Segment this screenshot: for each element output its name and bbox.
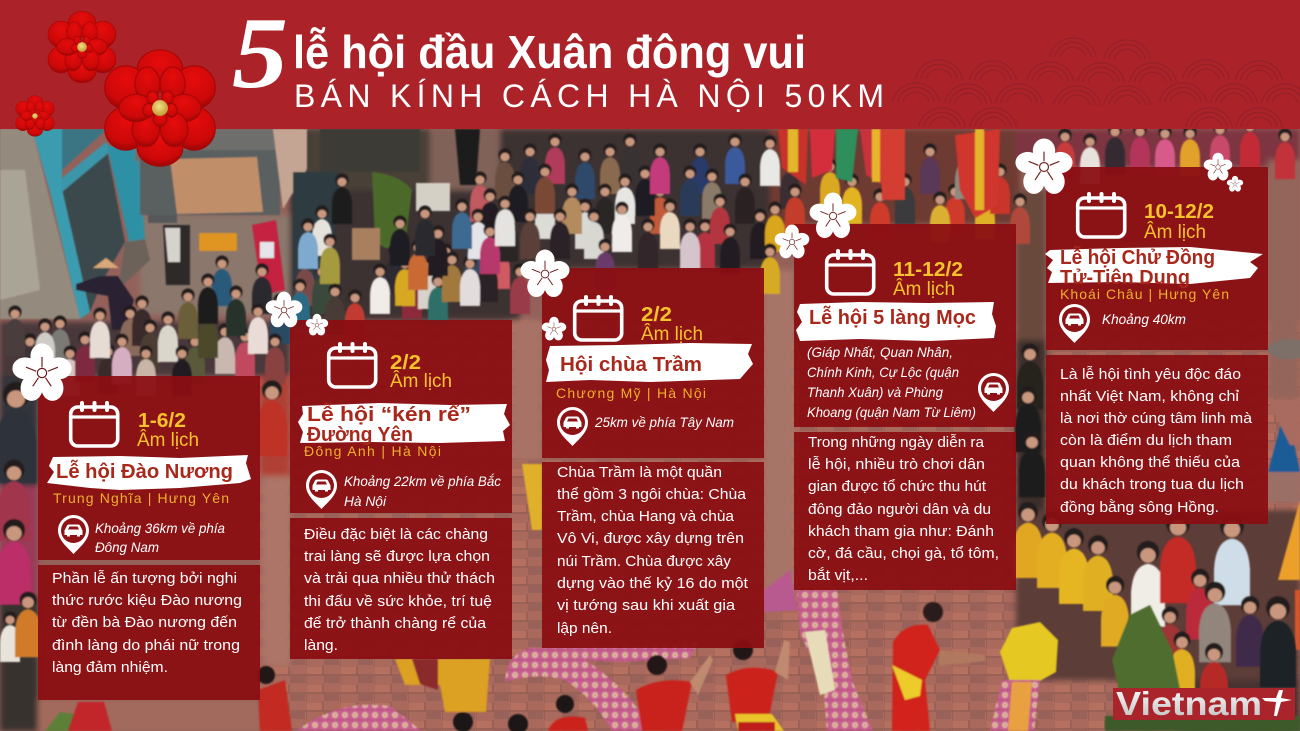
description: từ đền bà Đào nương đến	[52, 614, 237, 631]
date: 2/2	[641, 304, 672, 326]
description: đông đảo người dân và du	[808, 501, 991, 518]
distance	[344, 473, 501, 509]
stone	[1268, 339, 1300, 359]
icons: white flowers	[12, 138, 1243, 401]
festival name	[1060, 245, 1215, 289]
description: lễ hội, nhiều trò chơi dân	[808, 456, 985, 473]
date	[641, 304, 703, 345]
panel: Lễ hội Đào Nương	[38, 376, 260, 700]
distance: 25km về phía Tây Nam	[594, 414, 734, 430]
description: và trải qua nhiều thử thách	[304, 570, 495, 587]
description: vị tướng sau khi xuất gia	[557, 597, 736, 614]
panel: Lễ hội 5 làng Mọc	[794, 224, 1016, 590]
date: 1-6/2	[138, 410, 186, 432]
description: bắt vịt,...	[808, 567, 868, 584]
date: 10-12/2	[1144, 201, 1214, 223]
description: Vô Vi, được xây dựng trên	[557, 530, 744, 547]
description	[1060, 366, 1253, 516]
icon: calendar	[329, 344, 376, 387]
description: làng.	[304, 637, 338, 654]
description: thể gồm 3 ngôi chùa: Chùa	[557, 486, 747, 503]
description	[808, 434, 999, 584]
back row	[295, 256, 315, 306]
date: 11-12/2	[893, 259, 963, 281]
brush stroke	[1045, 247, 1263, 284]
description	[304, 526, 495, 654]
description	[557, 464, 749, 637]
villages: (Giáp Nhất, Quan Nhân,	[807, 344, 953, 360]
description: để trở thành chàng rể của	[304, 615, 487, 632]
icon: map pin car	[58, 515, 89, 554]
description: đồng bằng sông Hồng.	[1060, 499, 1219, 516]
date	[390, 352, 452, 392]
distance: Khoảng 36km về phía	[95, 520, 225, 536]
distance: Đông Nam	[95, 539, 159, 555]
icon: map pin car	[978, 373, 1009, 412]
festival name: Lễ hội Đào Nương	[56, 459, 233, 483]
date: 2/2	[390, 352, 421, 374]
festival name: Lễ hội 5 làng Mọc	[809, 305, 976, 329]
right crowd	[1013, 502, 1043, 578]
icon: map pin car	[557, 407, 588, 446]
description: Phần lễ ấn tượng bởi nghi	[52, 570, 237, 587]
right flags	[1268, 405, 1300, 472]
description: cờ, đá cầu, chọi gà, tổ tôm,	[808, 545, 999, 562]
header band	[0, 0, 1300, 129]
description: Trầm, chùa Hang và chùa	[557, 508, 735, 525]
description: Là lễ hội tình yêu độc đáo	[1060, 366, 1241, 383]
festival name: Tử-Tiên Dung	[1060, 266, 1190, 289]
villages: Khoang (quận Nam Từ Liêm)	[807, 404, 976, 420]
description: lập nên.	[557, 620, 612, 637]
brush stroke	[47, 455, 251, 490]
description: nhất Việt Nam, không chỉ	[1060, 388, 1240, 405]
date: Âm lịch	[641, 322, 703, 345]
panel: Hội chùa Trầm	[542, 268, 764, 648]
description: du khách trong tua du lịch	[1060, 476, 1244, 493]
motorbike	[163, 225, 190, 285]
hat person	[93, 258, 119, 268]
icon: map pin car	[1059, 304, 1090, 343]
shop sign	[199, 233, 237, 251]
distance: Khoảng 22km về phía Bắc	[344, 473, 501, 489]
brush stroke	[796, 302, 996, 341]
villages: Thanh Xuân) và Phùng	[807, 384, 943, 400]
description: quan không thể thiếu của	[1060, 454, 1241, 471]
front row	[5, 306, 25, 356]
description: khách tham gia như: Đánh	[808, 523, 994, 540]
description: là nơi thờ cúng tâm linh mà	[1060, 410, 1253, 427]
description: núi Trầm. Chùa được xây	[557, 553, 732, 570]
description: làng đảm nhiệm.	[52, 659, 168, 676]
description: Điều đặc biệt là các chàng	[304, 526, 488, 543]
icon: calendar	[71, 403, 118, 446]
description	[52, 570, 242, 676]
festival name: Đường Yên	[307, 423, 413, 446]
icon: map pin car	[306, 470, 337, 509]
location: Khoái Châu | Hưng Yên	[1060, 286, 1229, 302]
villages	[807, 344, 976, 420]
date: Âm lịch	[137, 428, 199, 451]
festival name: Hội chùa Trầm	[560, 353, 702, 376]
description: thi đấu về sức khỏe, trí tuệ	[304, 593, 492, 610]
panel: Lễ hội Chử Đồng Tử-Tiên Dung	[1045, 167, 1268, 524]
description: gian được tổ chức thu hút	[808, 478, 987, 495]
date	[893, 259, 963, 300]
title: lễ hội đầu Xuân đông vui	[293, 26, 806, 78]
distance: Khoảng 40km	[1102, 311, 1186, 327]
decorative scallop pattern	[892, 38, 1300, 127]
dragons, dancers	[68, 464, 1058, 731]
description: thức rước kiệu Đào nương	[52, 592, 242, 609]
upper street detail	[293, 172, 340, 290]
location: Trung Nghĩa | Hưng Yên	[53, 490, 229, 506]
date: Âm lịch	[1144, 220, 1206, 243]
building	[0, 129, 80, 319]
banner	[252, 220, 285, 295]
description: trai làng sẽ được lựa chọn	[304, 548, 490, 565]
location: Chương Mỹ | Hà Nội	[556, 385, 706, 401]
description: Trong những ngày diễn ra	[808, 434, 985, 451]
brush stroke	[298, 403, 510, 443]
date: Âm lịch	[893, 277, 955, 300]
festival name	[307, 402, 471, 446]
flags	[778, 129, 1000, 218]
logo: Vietnam+: Vietnam	[1116, 685, 1262, 722]
description: đình làng do phái nữ trong	[52, 637, 240, 654]
description: Chùa Trầm là một quần	[557, 464, 722, 481]
distance	[95, 520, 225, 555]
villages: Chính Kinh, Cự Lộc (quận	[807, 364, 959, 380]
panel: Lễ hội kén rể Đường Yên	[290, 320, 512, 659]
festival name: Lễ hội “kén rể”	[307, 402, 471, 426]
street and crowd under-colours	[140, 215, 300, 315]
icon: calendar	[1078, 194, 1125, 237]
festival name: Lễ hội Chử Đồng	[1060, 245, 1215, 269]
date	[1144, 201, 1214, 243]
title	[232, 0, 884, 114]
description: dựng vào thế kỷ 16 do một	[557, 575, 749, 592]
icon: calendar	[827, 251, 874, 294]
title: 5	[232, 0, 288, 110]
icons: red apricot flowers	[16, 11, 215, 166]
date	[137, 410, 199, 451]
icon: calendar	[575, 297, 622, 340]
plants	[45, 605, 1300, 731]
brush stroke	[546, 343, 753, 382]
distance: Hà Nội	[344, 493, 387, 509]
title: BÁN KÍNH CÁCH HÀ NỘI 50KM	[294, 78, 884, 114]
location: Đông Anh | Hà Nội	[304, 443, 441, 459]
date: Âm lịch	[390, 369, 452, 392]
description: còn là điểm du lịch tham	[1060, 432, 1232, 449]
